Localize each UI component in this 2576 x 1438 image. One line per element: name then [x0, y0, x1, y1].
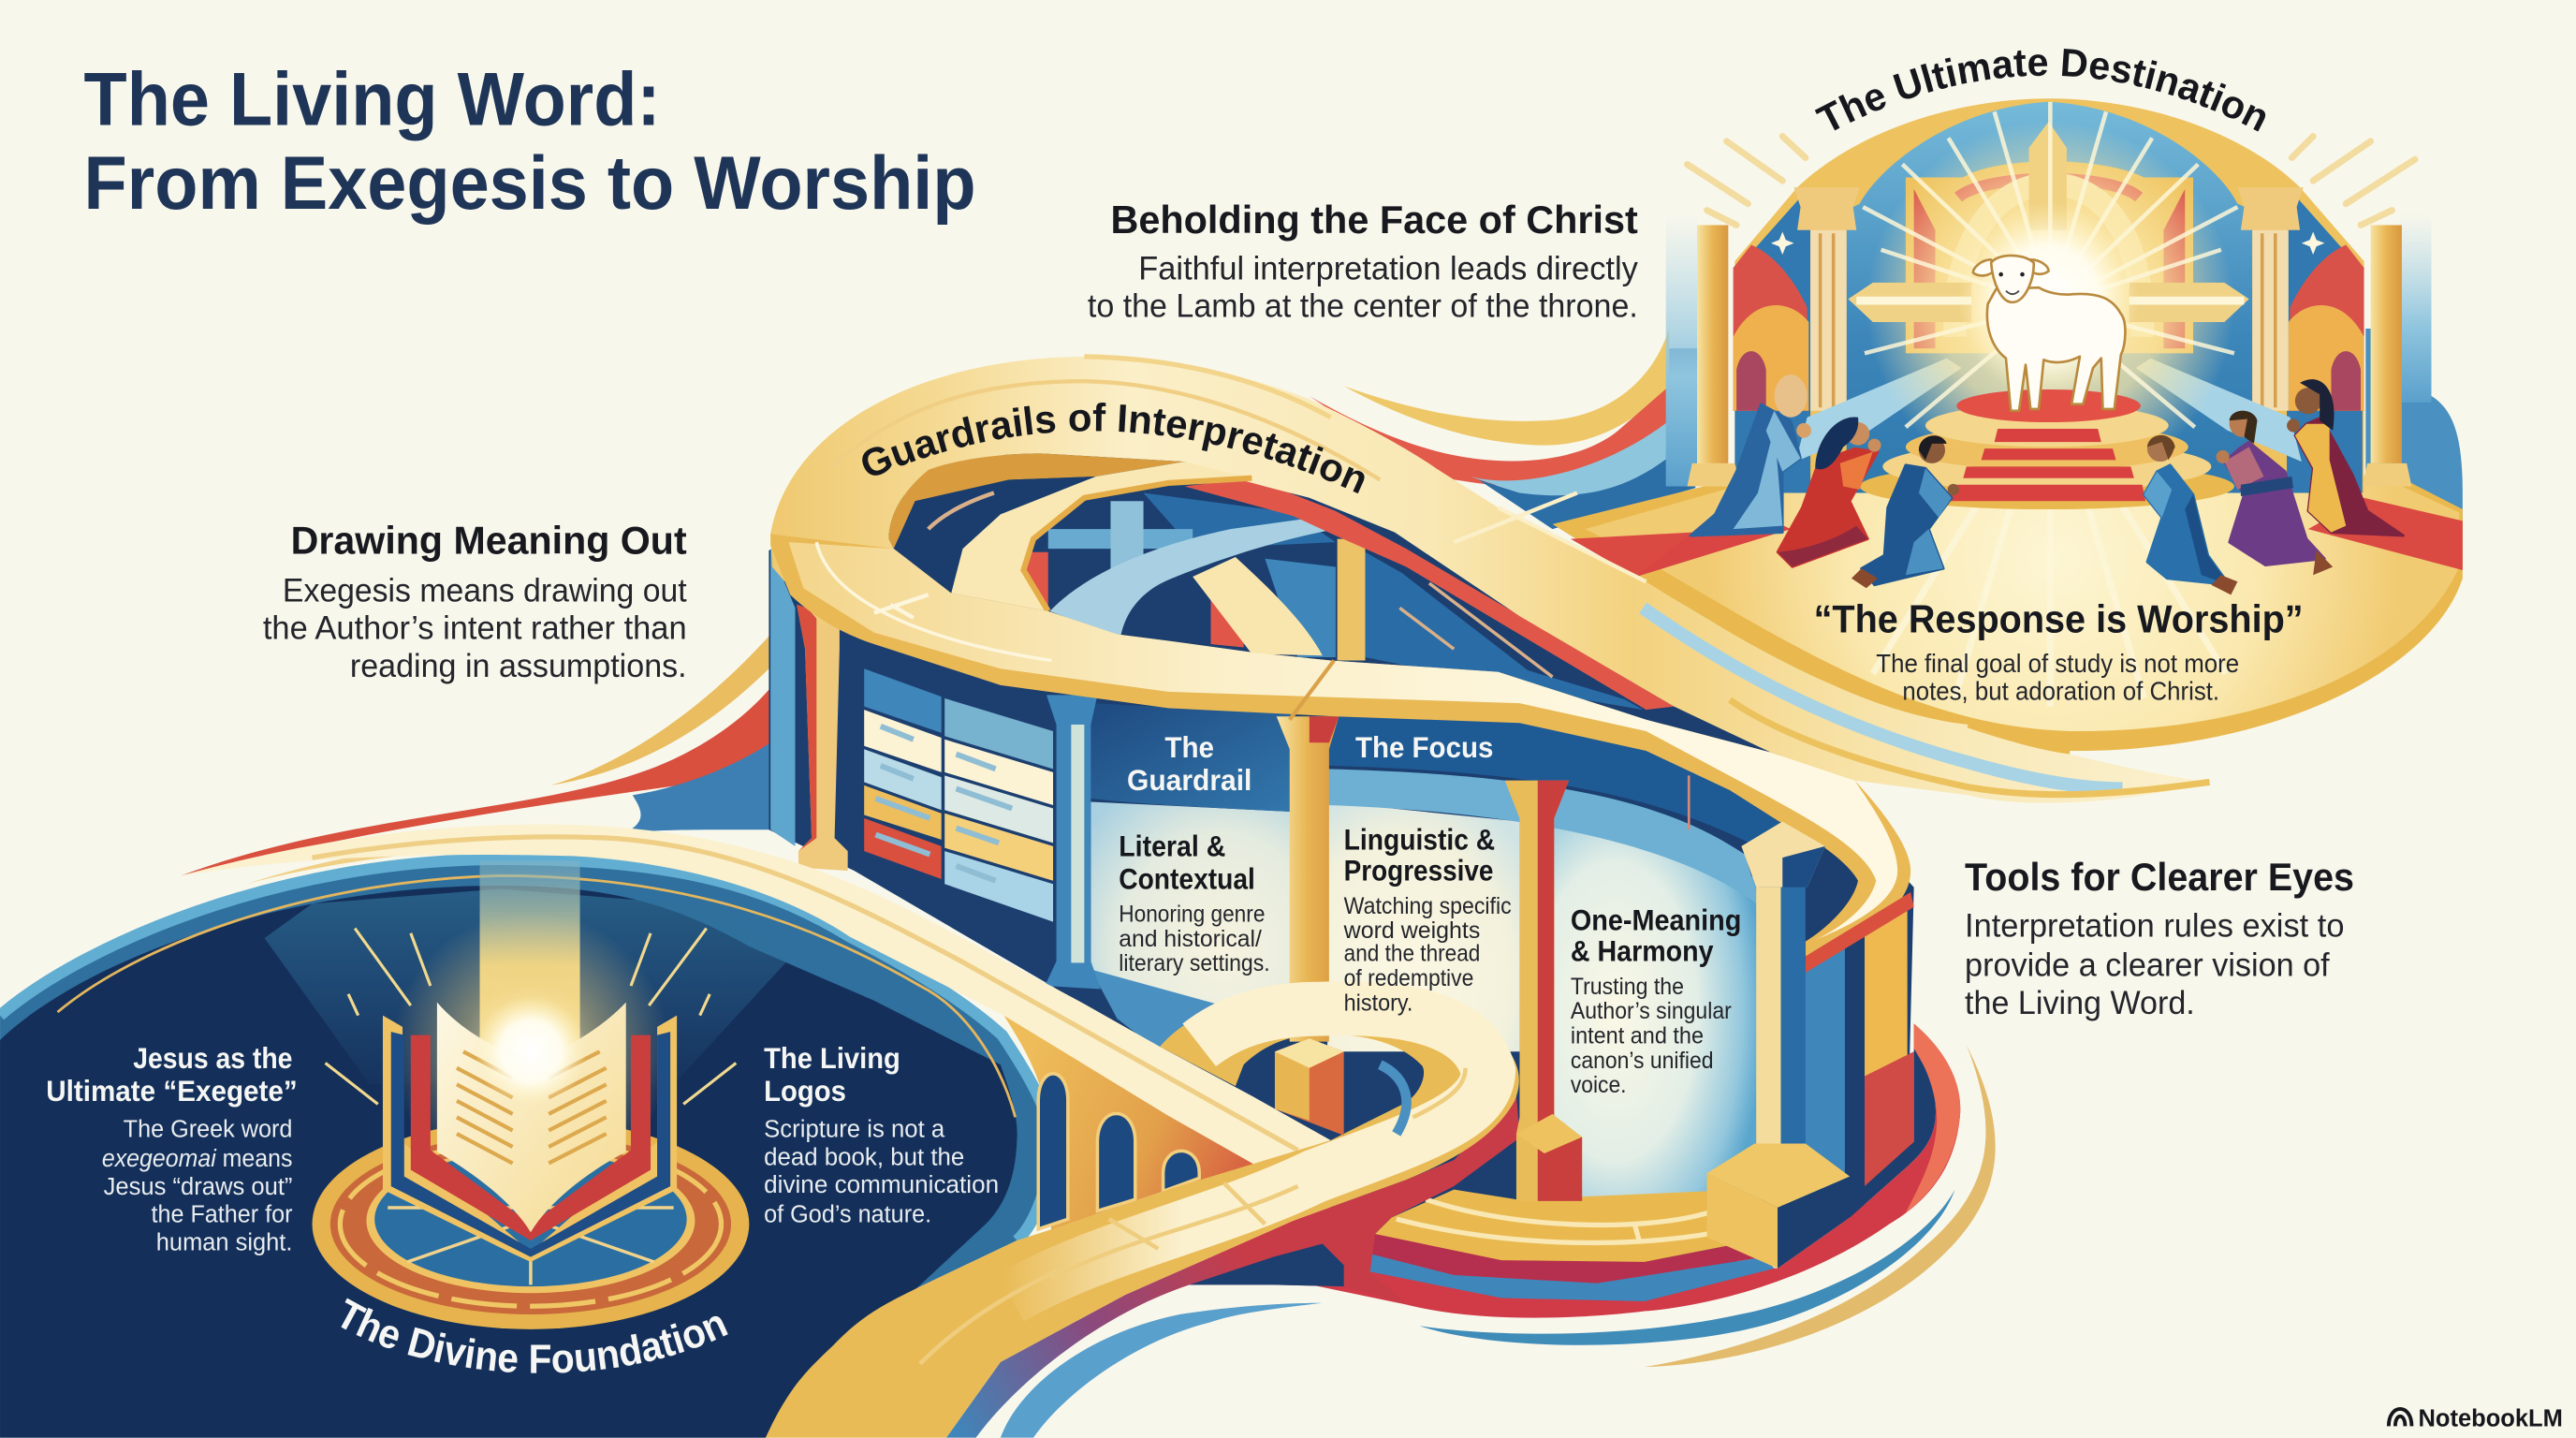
- blue back wall right: [2365, 329, 2463, 566]
- text: tools for clearer eyes: Interpretation rules exist to: [1965, 907, 2344, 944]
- light fan: [265, 888, 788, 1084]
- light beam: [480, 861, 580, 1051]
- right tower strips: [1804, 895, 1936, 1217]
- text: beholding the face of christ: to the Lamb at the center of the throne.: [1088, 288, 1638, 325]
- text: jesus as the ultimate exegete: [46, 1041, 298, 1256]
- text: the response is worship: The final goal of study is not more: [1876, 649, 2239, 678]
- road: pillar bases: [1275, 1038, 1344, 1136]
- text: linguistic and progressive: Linguistic &: [1344, 822, 1495, 856]
- text: jesus as the ultimate exegete: Jesus “draws out”: [104, 1172, 292, 1200]
- panel: the divine foundation: [0, 859, 1050, 1438]
- text: tools for clearer eyes: Tools for Clearer Eyes: [1965, 855, 2354, 899]
- worshippers: [1690, 374, 2404, 594]
- label: the guardrail: [1127, 730, 1251, 797]
- text: literal and contextual: literary settings.: [1119, 951, 1270, 976]
- text: linguistic and progressive: [1343, 822, 1512, 1016]
- left swoosh bands: [181, 633, 775, 884]
- road: foundation causeway: [181, 825, 1331, 1165]
- text: jesus as the ultimate exegete: Jesus as the: [133, 1041, 292, 1075]
- heading: the ultimate destination: The Ultimate Destination: [1814, 49, 2265, 131]
- carpets: [1571, 501, 1754, 577]
- text: literal and contextual: Honoring genre: [1119, 902, 1265, 928]
- text: linguistic and progressive: history.: [1344, 990, 1412, 1016]
- road: lower winding road: [766, 990, 1519, 1438]
- title: [84, 57, 976, 226]
- side panels: [1734, 244, 1808, 411]
- text: the living logos: of God’s nature.: [764, 1200, 931, 1228]
- floor rays: [1873, 501, 2226, 707]
- header bands: [1090, 703, 1292, 812]
- hole interiors: [1022, 478, 1674, 710]
- left wall strip: [770, 549, 795, 846]
- figure 6: [2287, 379, 2404, 536]
- text: the living logos: divine communication: [764, 1170, 999, 1198]
- text: tools for clearer eyes: the Living Word.: [1965, 985, 2195, 1021]
- waves behind destination: [1310, 213, 1699, 529]
- text: jesus as the ultimate exegete: The Greek word: [124, 1114, 292, 1142]
- text: jesus as the ultimate exegete: exegeomai means: [102, 1144, 292, 1172]
- small columns: [797, 605, 1339, 1042]
- throne steps: [1860, 389, 2234, 509]
- text: beholding the face of christ: Faithful interpretation leads directly: [1138, 250, 1638, 286]
- lower floor bands: [1311, 1023, 1960, 1318]
- column: blue: [1045, 695, 1101, 990]
- column: gold centre: [1277, 716, 1339, 1042]
- dome: [1734, 98, 2364, 493]
- text: literal and contextual: and historical/: [1119, 927, 1262, 952]
- text: linguistic and progressive: word weights: [1343, 918, 1480, 944]
- text: one-meaning and harmony: & Harmony: [1571, 934, 1714, 968]
- text: one-meaning and harmony: Trusting the: [1571, 975, 1684, 1000]
- text: drawing meaning out: Exegesis means drawing out: [283, 572, 687, 609]
- red edge right hook: [1806, 892, 1914, 973]
- text: beholding the face of christ: Beholding the Face of Christ: [1110, 198, 1638, 242]
- text: literal and contextual: [1119, 829, 1270, 976]
- column: big front pillar: [1707, 822, 1850, 1269]
- text: drawing meaning out: [263, 518, 687, 684]
- text: one-meaning and harmony: voice.: [1571, 1073, 1627, 1098]
- text: literal and contextual: Contextual: [1119, 861, 1255, 895]
- notebooklm logo: NotebookLM: [2418, 1403, 2563, 1431]
- label: the guardrail: Guardrail: [1127, 763, 1251, 797]
- figure 5: [2217, 411, 2333, 575]
- text: one-meaning and harmony: One-Meaning: [1571, 902, 1741, 936]
- text: the living logos: The Living: [764, 1041, 900, 1075]
- central arch frame: [1906, 161, 2193, 353]
- floor: [1553, 477, 2463, 751]
- text: linguistic and progressive: and the thread: [1344, 942, 1480, 967]
- text: the response is worship: notes, but adoration of Christ.: [1902, 677, 2219, 706]
- text: linguistic and progressive: of redemptive: [1344, 966, 1473, 991]
- text: the living logos: Scripture is not a: [764, 1114, 945, 1142]
- small swooshes: [1001, 1045, 1996, 1438]
- outer rays: [1687, 137, 2415, 225]
- heading: the divine foundation: The Divine Foundation: [341, 1298, 728, 1373]
- text: the living logos: dead book, but the: [764, 1142, 964, 1170]
- second loop strand: [951, 462, 1251, 611]
- light beams: [1795, 359, 2302, 462]
- heading: guardrails of interpretation: Guardrails of Interpretation: [862, 403, 1365, 494]
- text: the response is worship: [1814, 597, 2304, 706]
- column: red left: [797, 605, 848, 871]
- figure 4: [2144, 435, 2237, 594]
- figure 1: [1690, 374, 1811, 536]
- text: drawing meaning out: reading in assumptions.: [350, 648, 687, 684]
- text: drawing meaning out: the Author’s intent rather than: [263, 610, 687, 647]
- rays and cross: [1848, 102, 2249, 490]
- text: tools for clearer eyes: provide a clearer vision of: [1965, 946, 2330, 983]
- text: one-meaning and harmony: Author’s singular: [1571, 999, 1732, 1024]
- icon: lamb: [1973, 256, 2125, 411]
- light panels: [1090, 801, 1292, 1027]
- ring base: [313, 1119, 749, 1329]
- sparkles: [1771, 231, 2324, 255]
- text: one-meaning and harmony: [1571, 902, 1741, 1098]
- figure 3: [1852, 435, 1959, 588]
- text: the living logos: Logos: [764, 1074, 846, 1108]
- text: tools for clearer eyes: [1965, 855, 2354, 1021]
- building base: [768, 435, 1914, 1298]
- figure 2: [1778, 417, 1881, 566]
- column: gold and red: [1505, 781, 1582, 1201]
- text: the living logos: [764, 1041, 999, 1228]
- text: jesus as the ultimate exegete: the Father for: [152, 1200, 293, 1228]
- panel: the ultimate destination: [1553, 98, 2463, 751]
- title: From Exegesis to Worship: [84, 141, 976, 226]
- text: beholding the face of christ: [1088, 198, 1638, 325]
- text: drawing meaning out: Drawing Meaning Out: [291, 518, 687, 562]
- label: the guardrail: The: [1164, 730, 1214, 764]
- panel: guardrails building: [768, 435, 1960, 1318]
- text: one-meaning and harmony: intent and the: [1571, 1023, 1704, 1049]
- label: the focus: The Focus: [1355, 730, 1493, 764]
- text: one-meaning and harmony: canon’s unified: [1571, 1049, 1714, 1074]
- rays: [326, 929, 736, 1104]
- columns: [1687, 187, 2411, 486]
- text: literal and contextual: Literal &: [1119, 829, 1225, 862]
- text: jesus as the ultimate exegete: Ultimate “Exegete”: [46, 1074, 298, 1108]
- text: linguistic and progressive: Progressive: [1344, 854, 1493, 888]
- text: linguistic and progressive: Watching specific: [1344, 894, 1512, 919]
- text: the response is worship: “The Response is Worship”: [1814, 597, 2304, 641]
- road: lower loop right hook: [770, 534, 1910, 956]
- road: guardrails loop: [770, 357, 2210, 803]
- icon: open book: [383, 996, 677, 1262]
- aqueduct wall: [1003, 1016, 1255, 1249]
- text: jesus as the ultimate exegete: human sight.: [156, 1228, 292, 1256]
- data table: [864, 668, 1053, 922]
- title: The Living Word:: [84, 57, 661, 141]
